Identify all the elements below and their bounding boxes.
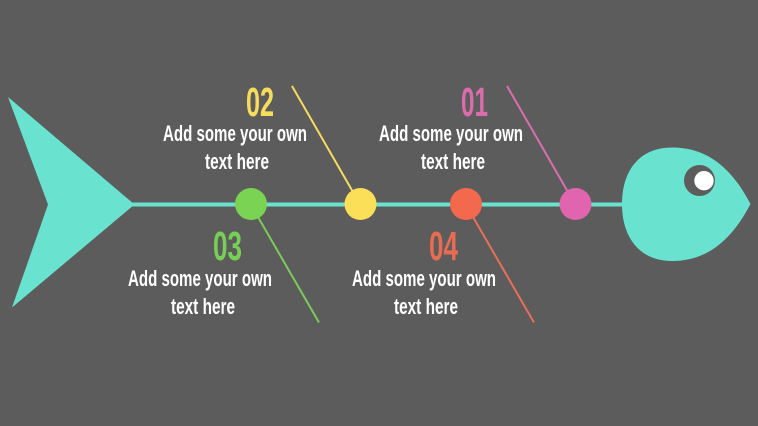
text 01 bbox=[379, 121, 523, 174]
fish tail bbox=[8, 97, 134, 308]
text 04 bbox=[352, 266, 496, 319]
number 02: 02 bbox=[246, 79, 274, 125]
branch 04 bbox=[352, 188, 534, 322]
branch 02 bbox=[163, 79, 376, 220]
text 02: Add some your own bbox=[163, 121, 307, 146]
branch line 04 bbox=[473, 217, 534, 322]
number 01: 01 bbox=[461, 79, 488, 125]
text 04: text here bbox=[394, 294, 458, 319]
branch line 03 bbox=[258, 217, 319, 322]
branch line 02 bbox=[292, 86, 353, 192]
number 03: 03 bbox=[213, 223, 242, 269]
fish head bbox=[622, 148, 750, 261]
text 01: text here bbox=[421, 149, 485, 174]
node 02 bbox=[344, 188, 376, 220]
node 01 bbox=[560, 188, 592, 220]
spine bbox=[130, 202, 625, 206]
branch 01 bbox=[379, 79, 592, 220]
number 04: 04 bbox=[429, 223, 458, 269]
branch 03 bbox=[128, 188, 319, 322]
text 04: Add some your own bbox=[352, 266, 496, 291]
text 03: text here bbox=[171, 294, 235, 319]
text 01: Add some your own bbox=[379, 121, 523, 146]
branch line 01 bbox=[507, 86, 568, 192]
text 03: Add some your own bbox=[128, 266, 272, 291]
text 02 bbox=[163, 121, 307, 174]
fish eye bbox=[684, 165, 715, 196]
node 04 bbox=[450, 188, 482, 220]
node 03 bbox=[235, 188, 267, 220]
text 02: text here bbox=[205, 149, 269, 174]
text 03 bbox=[128, 266, 272, 319]
